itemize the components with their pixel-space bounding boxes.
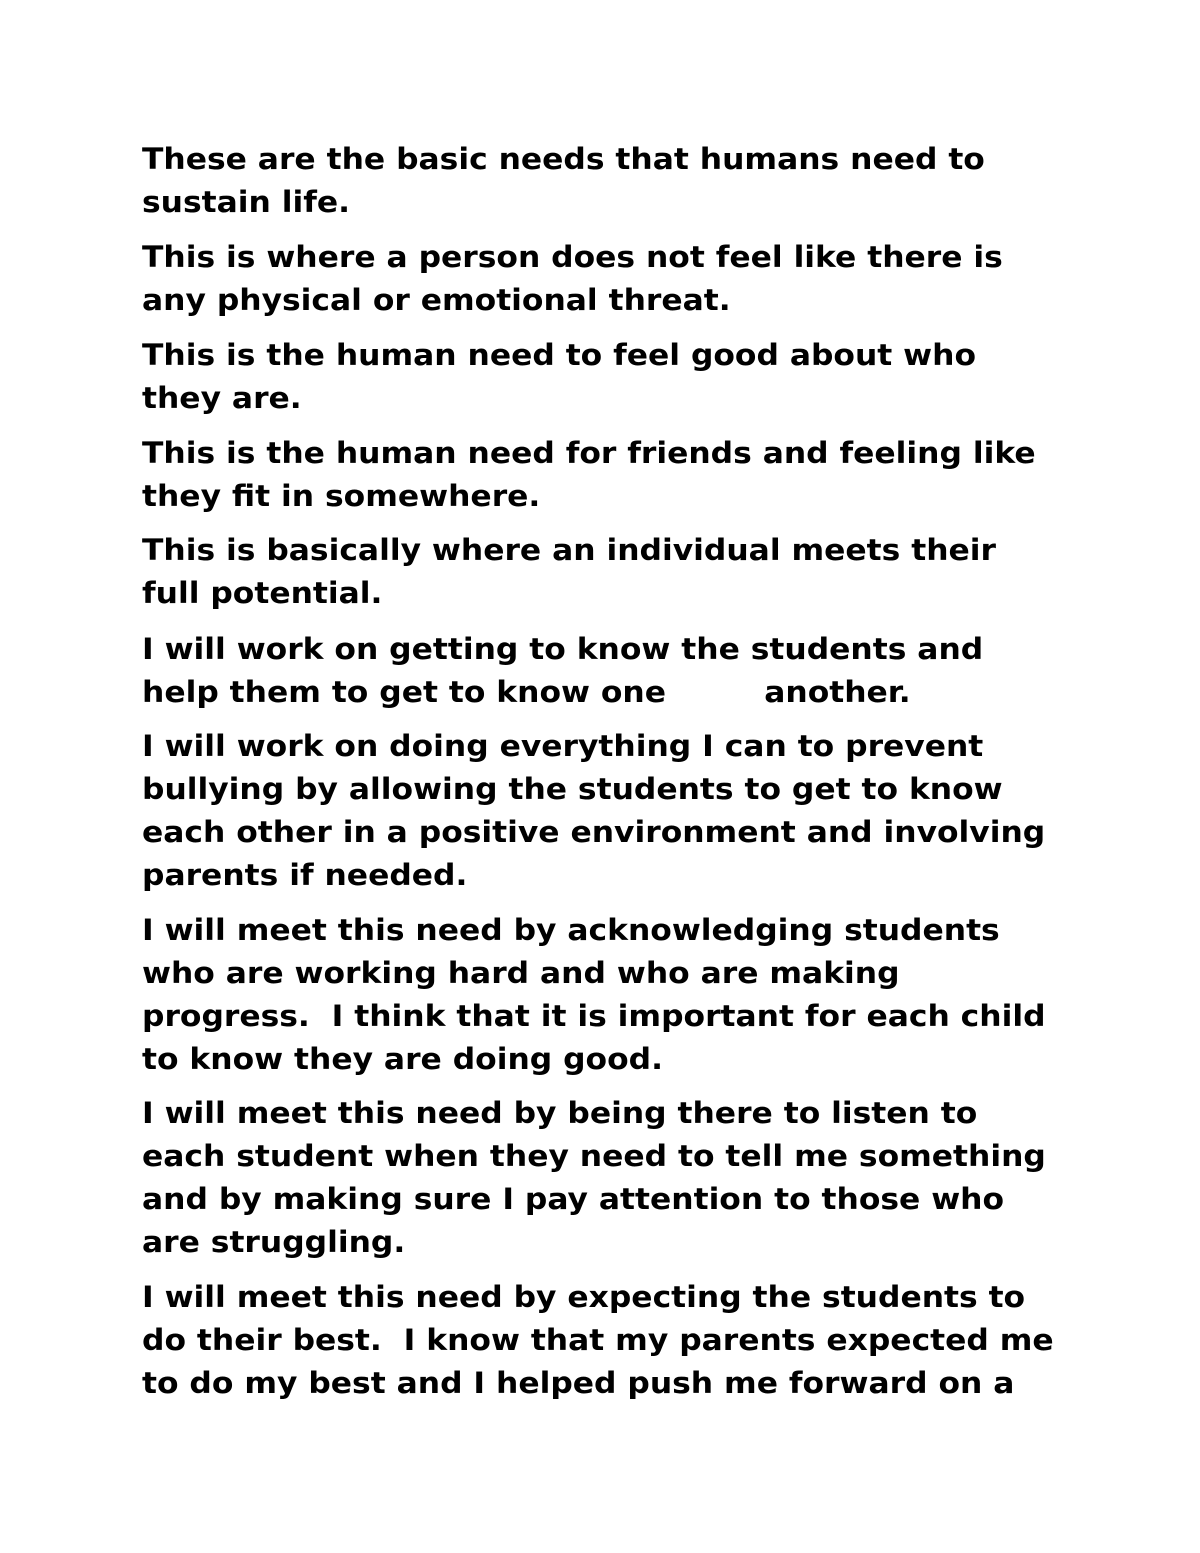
text block: physiological — [142, 142, 985, 219]
text block: plan 4: are struggling. — [142, 1225, 405, 1259]
text block: plan 4: I will meet this need by being there to listen to — [142, 1096, 977, 1130]
text block: plan 4 — [142, 1096, 1046, 1259]
text block: plan 2: I will work on doing everything I can to prevent — [142, 729, 983, 763]
text block: plan 3: who are working hard and who are making — [142, 956, 900, 990]
text block: plan 3: to know they are doing good. — [142, 1042, 663, 1076]
text block: safety: any physical or emotional threat. — [142, 283, 731, 317]
text block: belonging: This is the human need for friends and feeling like — [142, 436, 1036, 470]
text block: plan 5: I will meet this need by expecting the students to — [142, 1280, 1025, 1314]
text block: self-actualization — [142, 533, 996, 610]
text block: plan 4: each student when they need to tell me something — [142, 1139, 1046, 1173]
text block: belonging — [142, 436, 1036, 513]
text block: safety: This is where a person does not feel like there is — [142, 240, 1003, 274]
text block: self-actualization: This is basically where an individual meets their — [142, 533, 996, 567]
text block: plan 1 — [142, 632, 983, 709]
text block: plan 3: progress. I think that it is important for each child — [142, 999, 1046, 1033]
text block: safety — [142, 240, 1003, 317]
text block: physiological: sustain life. — [142, 185, 350, 219]
text block: plan 1: help them to get to know one another. — [142, 675, 911, 709]
text block: plan 3: I will meet this need by acknowledging students — [142, 913, 1000, 947]
text block: self-actualization: full potential. — [142, 576, 382, 610]
text block: plan 2: each other in a positive environment and involving — [142, 815, 1045, 849]
text block: plan 4: and by making sure I pay attention to those who — [142, 1182, 1004, 1216]
text block: plan 2: parents if needed. — [142, 858, 467, 892]
text block: esteem: they are. — [142, 381, 302, 415]
text block: plan 1: I will work on getting to know the students and — [142, 632, 983, 666]
text block: belonging: they fit in somewhere. — [142, 479, 540, 513]
text block: plan 5: do their best. I know that my parents expected me — [142, 1323, 1054, 1357]
text block: plan 3 — [142, 913, 1046, 1076]
text block: plan 5 — [142, 1280, 1054, 1400]
text block: plan 2 — [142, 729, 1045, 892]
text block: plan 5: to do my best and I helped push me forward on a — [142, 1366, 1014, 1400]
text block: plan 2: bullying by allowing the students to get to know — [142, 772, 1003, 806]
text block: esteem: This is the human need to feel good about who — [142, 338, 976, 372]
text block: esteem — [142, 338, 976, 415]
text block: physiological: These are the basic needs that humans need to — [142, 142, 985, 176]
